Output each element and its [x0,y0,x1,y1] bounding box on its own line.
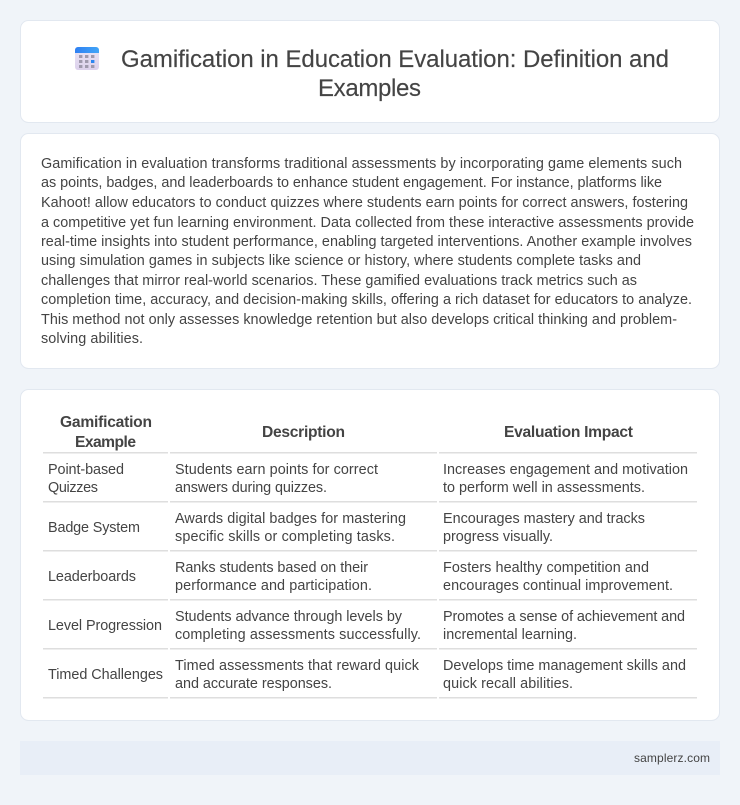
text block: intro paragraph: real-time insights into student performance, enabling targeted interventions. Another example involves [41,234,692,250]
text block: intro paragraph: as points, badges, and leaderboards to enhance student engagement. For instance, platforms like [41,175,662,191]
table row: leaderboards: Leaderboards [48,569,136,585]
table row: level progression: Level Progression [48,618,162,634]
table row: badge system: Badge System [48,520,140,536]
table row: leaderboards: Ranks students based on their [175,560,368,576]
panel: intro paragraph card [20,134,720,368]
table row: point-based quizzes: to perform well in assessments. [443,480,645,496]
table row: leaderboards: Fosters healthy competition and [443,560,649,576]
text block: intro paragraph: challenges that mirror real-world scenarios. These gamified evaluations track metrics such as [41,273,637,289]
table row: badge system: specific skills or completing tasks. [175,529,395,545]
table header row: Description [262,424,345,441]
text block: intro paragraph [41,156,694,347]
table row: badge system: progress visually. [443,529,553,545]
text block: intro paragraph: solving abilities. [41,331,143,347]
table row: timed challenges: Timed Challenges [48,667,163,683]
table row: badge system: Awards digital badges for mastering [175,511,406,527]
table row: leaderboards: performance and participation. [175,578,372,594]
icon: calendar [75,47,99,70]
table header row [60,414,633,451]
panel: title card [20,20,720,122]
title [121,46,669,102]
table row: point-based quizzes: answers during quizzes. [175,480,327,496]
title: Gamification in Education Evaluation: Definition and [121,46,669,73]
table row: level progression: incremental learning. [443,627,577,643]
table row: level progression [48,609,685,643]
table row: point-based quizzes: Increases engagement and motivation [443,462,688,478]
table row: point-based quizzes: Point-based [48,462,124,478]
text block: intro paragraph: Kahoot! allow educators to conduct quizzes where students earn points for correct answers, fostering [41,195,688,211]
text block: intro paragraph: completion time, accuracy, and decision-making skills, offering a rich dataset for educators to analyze. [41,292,692,308]
table row: level progression: completing assessments successfully. [175,627,421,643]
footer text: samplerz.com [634,751,710,765]
panel: table card [20,390,720,720]
text block: intro paragraph: Gamification in evaluation transforms traditional assessments by incorporating game elements such [41,156,682,172]
footer bar [20,741,720,775]
table row: level progression: Promotes a sense of achievement and [443,609,685,625]
text block: intro paragraph: using simulation games in subjects like science or history, where students complete tasks and [41,253,641,269]
table row: leaderboards [48,560,673,594]
table row: timed challenges: quick recall abilities. [443,676,573,692]
table row: point-based quizzes: Students earn points for correct [175,462,378,478]
table row: timed challenges: Timed assessments that reward quick [175,658,420,674]
table row: leaderboards: encourages continual improvement. [443,578,673,594]
table row: level progression: Students advance through levels by [175,609,403,625]
text block: intro paragraph: a competitive yet fun learning environment. Data collected from these interactive assessments provide [41,215,694,231]
table header row: Gamification [60,414,152,431]
title: Examples [318,75,421,102]
table row: timed challenges: Develops time management skills and [443,658,686,674]
table row: point-based quizzes [48,462,688,496]
table row: badge system: Encourages mastery and tracks [443,511,645,527]
table row: badge system [48,511,645,545]
table row: timed challenges: and accurate responses. [175,676,332,692]
table row: timed challenges [48,658,686,692]
text block: intro paragraph: This method not only assesses knowledge retention but also develops critical thinking and problem- [41,312,677,328]
table header row: Example [75,434,136,451]
table header row: Evaluation Impact [504,424,633,441]
table row: point-based quizzes: Quizzes [48,480,98,496]
